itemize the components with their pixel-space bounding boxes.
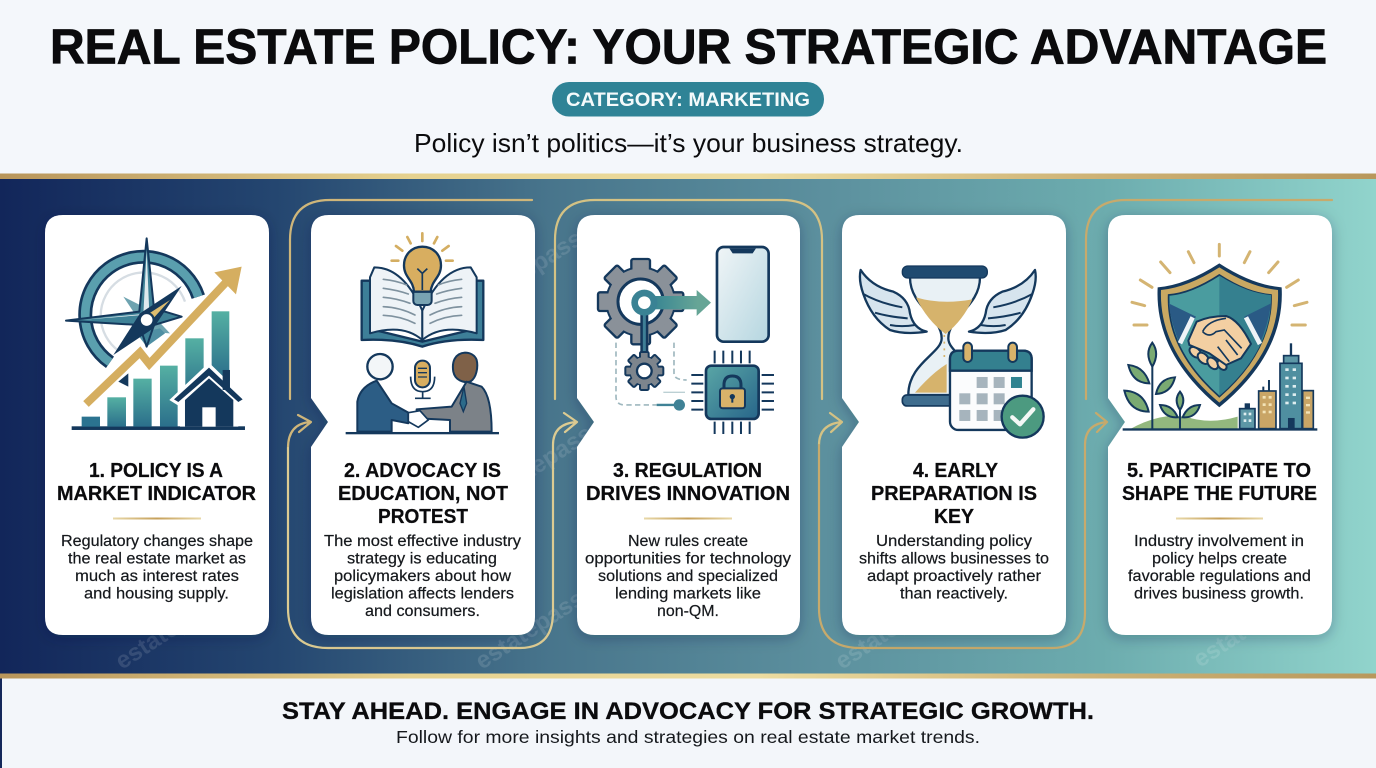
heading (871, 460, 1037, 528)
body text: and housing supply. (84, 586, 229, 602)
watermarks: estatepass (479, 420, 597, 510)
heading (338, 460, 508, 528)
body text: solutions and specialized (598, 568, 778, 585)
body text: than reactively. (900, 586, 1008, 602)
body text: non-QM. (657, 603, 719, 620)
watermarks: estatepass (831, 585, 949, 675)
body text: and consumers. (365, 603, 480, 620)
watermarks: estatepass (469, 225, 587, 315)
arrow: step 2 to step 3 (288, 413, 577, 648)
heading: 5. PARTICIPATE TO (1127, 460, 1311, 482)
heading: PROTEST (378, 506, 468, 528)
panel: step 4 (842, 215, 1066, 635)
title: REAL ESTATE POLICY: YOUR STRATEGIC ADVANTAGE (50, 20, 1327, 74)
body text: shifts allows businesses to (859, 550, 1049, 568)
body text (859, 533, 1049, 602)
panel: step 1 (45, 215, 269, 635)
body text: Regulatory changes shape (61, 533, 253, 550)
panel: step 2 (311, 215, 535, 635)
body text: New rules create (628, 533, 748, 550)
body text: adapt proactively rather (867, 568, 1041, 585)
body text: much as interest rates (75, 568, 239, 585)
body text: legislation affects lenders (331, 586, 514, 602)
panel: step 3 (577, 215, 800, 635)
body text: Understanding policy (876, 533, 1032, 550)
subtitle: Policy isn’t politics—it’s your business strategy. (414, 128, 963, 158)
watermarks (111, 225, 1307, 675)
heading: PREPARATION IS (871, 483, 1037, 505)
body text (585, 533, 791, 620)
heading: 2. ADVOCACY IS (344, 460, 501, 482)
icon: book, light bulb, handshake and microphone (346, 233, 499, 434)
watermarks: estatepass (111, 585, 229, 675)
icon: winged hourglass and calendar (860, 266, 1044, 438)
heading: 3. REGULATION (613, 460, 762, 482)
icon: compass, rising arrow, bars and house (66, 238, 247, 430)
watermarks: estatepass (471, 585, 589, 675)
heading: EDUCATION, NOT (338, 483, 508, 505)
body text: policymakers about how (334, 568, 512, 585)
body text: Industry involvement in (1134, 533, 1304, 550)
heading (1122, 460, 1317, 505)
watermarks: estatepass (1189, 583, 1307, 673)
body text (61, 533, 253, 602)
gradient band (0, 174, 1376, 678)
heading: MARKET INDICATOR (57, 483, 257, 505)
body text: strategy is educating (347, 550, 497, 568)
footer note: Follow for more insights and strategies on real estate market trends. (396, 727, 980, 747)
body text: favorable regulations and (1128, 568, 1311, 585)
arrow: step 1 to step 2 (288, 200, 532, 448)
heading: KEY (934, 506, 975, 528)
heading: 4. EARLY (913, 460, 999, 482)
body text: lending markets like (615, 586, 761, 602)
heading: SHAPE THE FUTURE (1122, 483, 1317, 505)
body text: policy helps create (1152, 550, 1287, 568)
body text: the real estate market as (68, 550, 246, 568)
body text: opportunities for technology (585, 550, 791, 568)
footer (0, 678, 1376, 768)
heading: DRIVES INNOVATION (586, 483, 790, 505)
icon: gears, phone and secure chip (598, 247, 774, 434)
heading (57, 460, 257, 505)
icon: shield with handshake, plants and city (1123, 244, 1317, 431)
category pill (552, 82, 824, 116)
arrow: step 4 to step 5 (819, 200, 1332, 648)
call to action: STAY AHEAD. ENGAGE IN ADVOCACY FOR STRATEGIC GROWTH. (282, 698, 1094, 725)
heading (586, 460, 790, 505)
arrow: step 3 to step 4 (555, 200, 842, 445)
category pill: CATEGORY: MARKETING (566, 89, 810, 111)
body text (324, 533, 521, 620)
heading: 1. POLICY IS A (89, 460, 223, 482)
body text (1128, 533, 1311, 602)
body text: The most effective industry (324, 533, 521, 550)
body text: drives business growth. (1134, 586, 1304, 602)
panel: step 5 (1108, 215, 1332, 635)
